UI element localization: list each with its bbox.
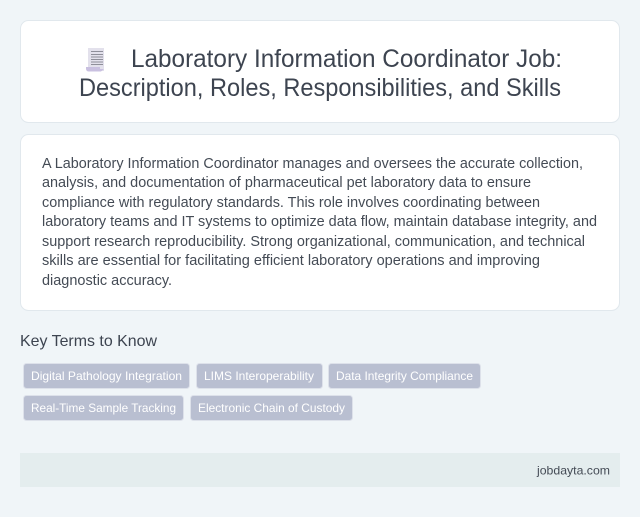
tag: Digital Pathology Integration: Digital Pathology Integration <box>31 369 182 383</box>
footer source: jobdayta.com <box>536 464 610 478</box>
tag: Real-Time Sample Tracking <box>24 396 184 420</box>
tag: Data Integrity Compliance: Data Integrity Compliance <box>336 369 473 383</box>
footer bar <box>20 453 620 487</box>
heading: key terms: Key Terms to Know <box>20 333 157 350</box>
description text: compliance with regulatory standards. This role involves coordinating between <box>42 195 540 211</box>
description text: support research reproducibility. Strong organizational, communication, and technical <box>42 234 585 250</box>
tag: LIMS Interoperability: LIMS Interoperability <box>204 369 314 383</box>
panel: title card <box>20 20 620 122</box>
description text: laboratory teams and IT systems to optimize data flow, maintain database integrity, and <box>42 214 597 230</box>
tag: Real-Time Sample Tracking: Real-Time Sample Tracking <box>31 401 176 415</box>
description text: analysis, and documentation of pharmaceutical pet laboratory data to ensure <box>42 175 531 191</box>
tag: LIMS Interoperability <box>196 364 322 388</box>
tag: Data Integrity Compliance <box>328 364 480 388</box>
panel: description <box>20 134 620 310</box>
key term tags <box>24 364 480 420</box>
description text: diagnostic accuracy. <box>42 273 172 289</box>
description text: A Laboratory Information Coordinator manages and oversees the accurate collection, <box>42 156 583 172</box>
title: Laboratory Information Coordinator Job: <box>131 45 562 73</box>
tag: Electronic Chain of Custody <box>190 396 352 420</box>
description text: skills are essential for facilitating efficient laboratory operations and improving <box>42 253 540 269</box>
description text <box>42 156 597 289</box>
icon: document <box>86 48 104 72</box>
tag: Electronic Chain of Custody: Electronic Chain of Custody <box>198 401 345 415</box>
title: Description, Roles, Responsibilities, and Skills <box>79 74 561 102</box>
title <box>79 45 562 102</box>
tag: Digital Pathology Integration <box>24 364 190 388</box>
